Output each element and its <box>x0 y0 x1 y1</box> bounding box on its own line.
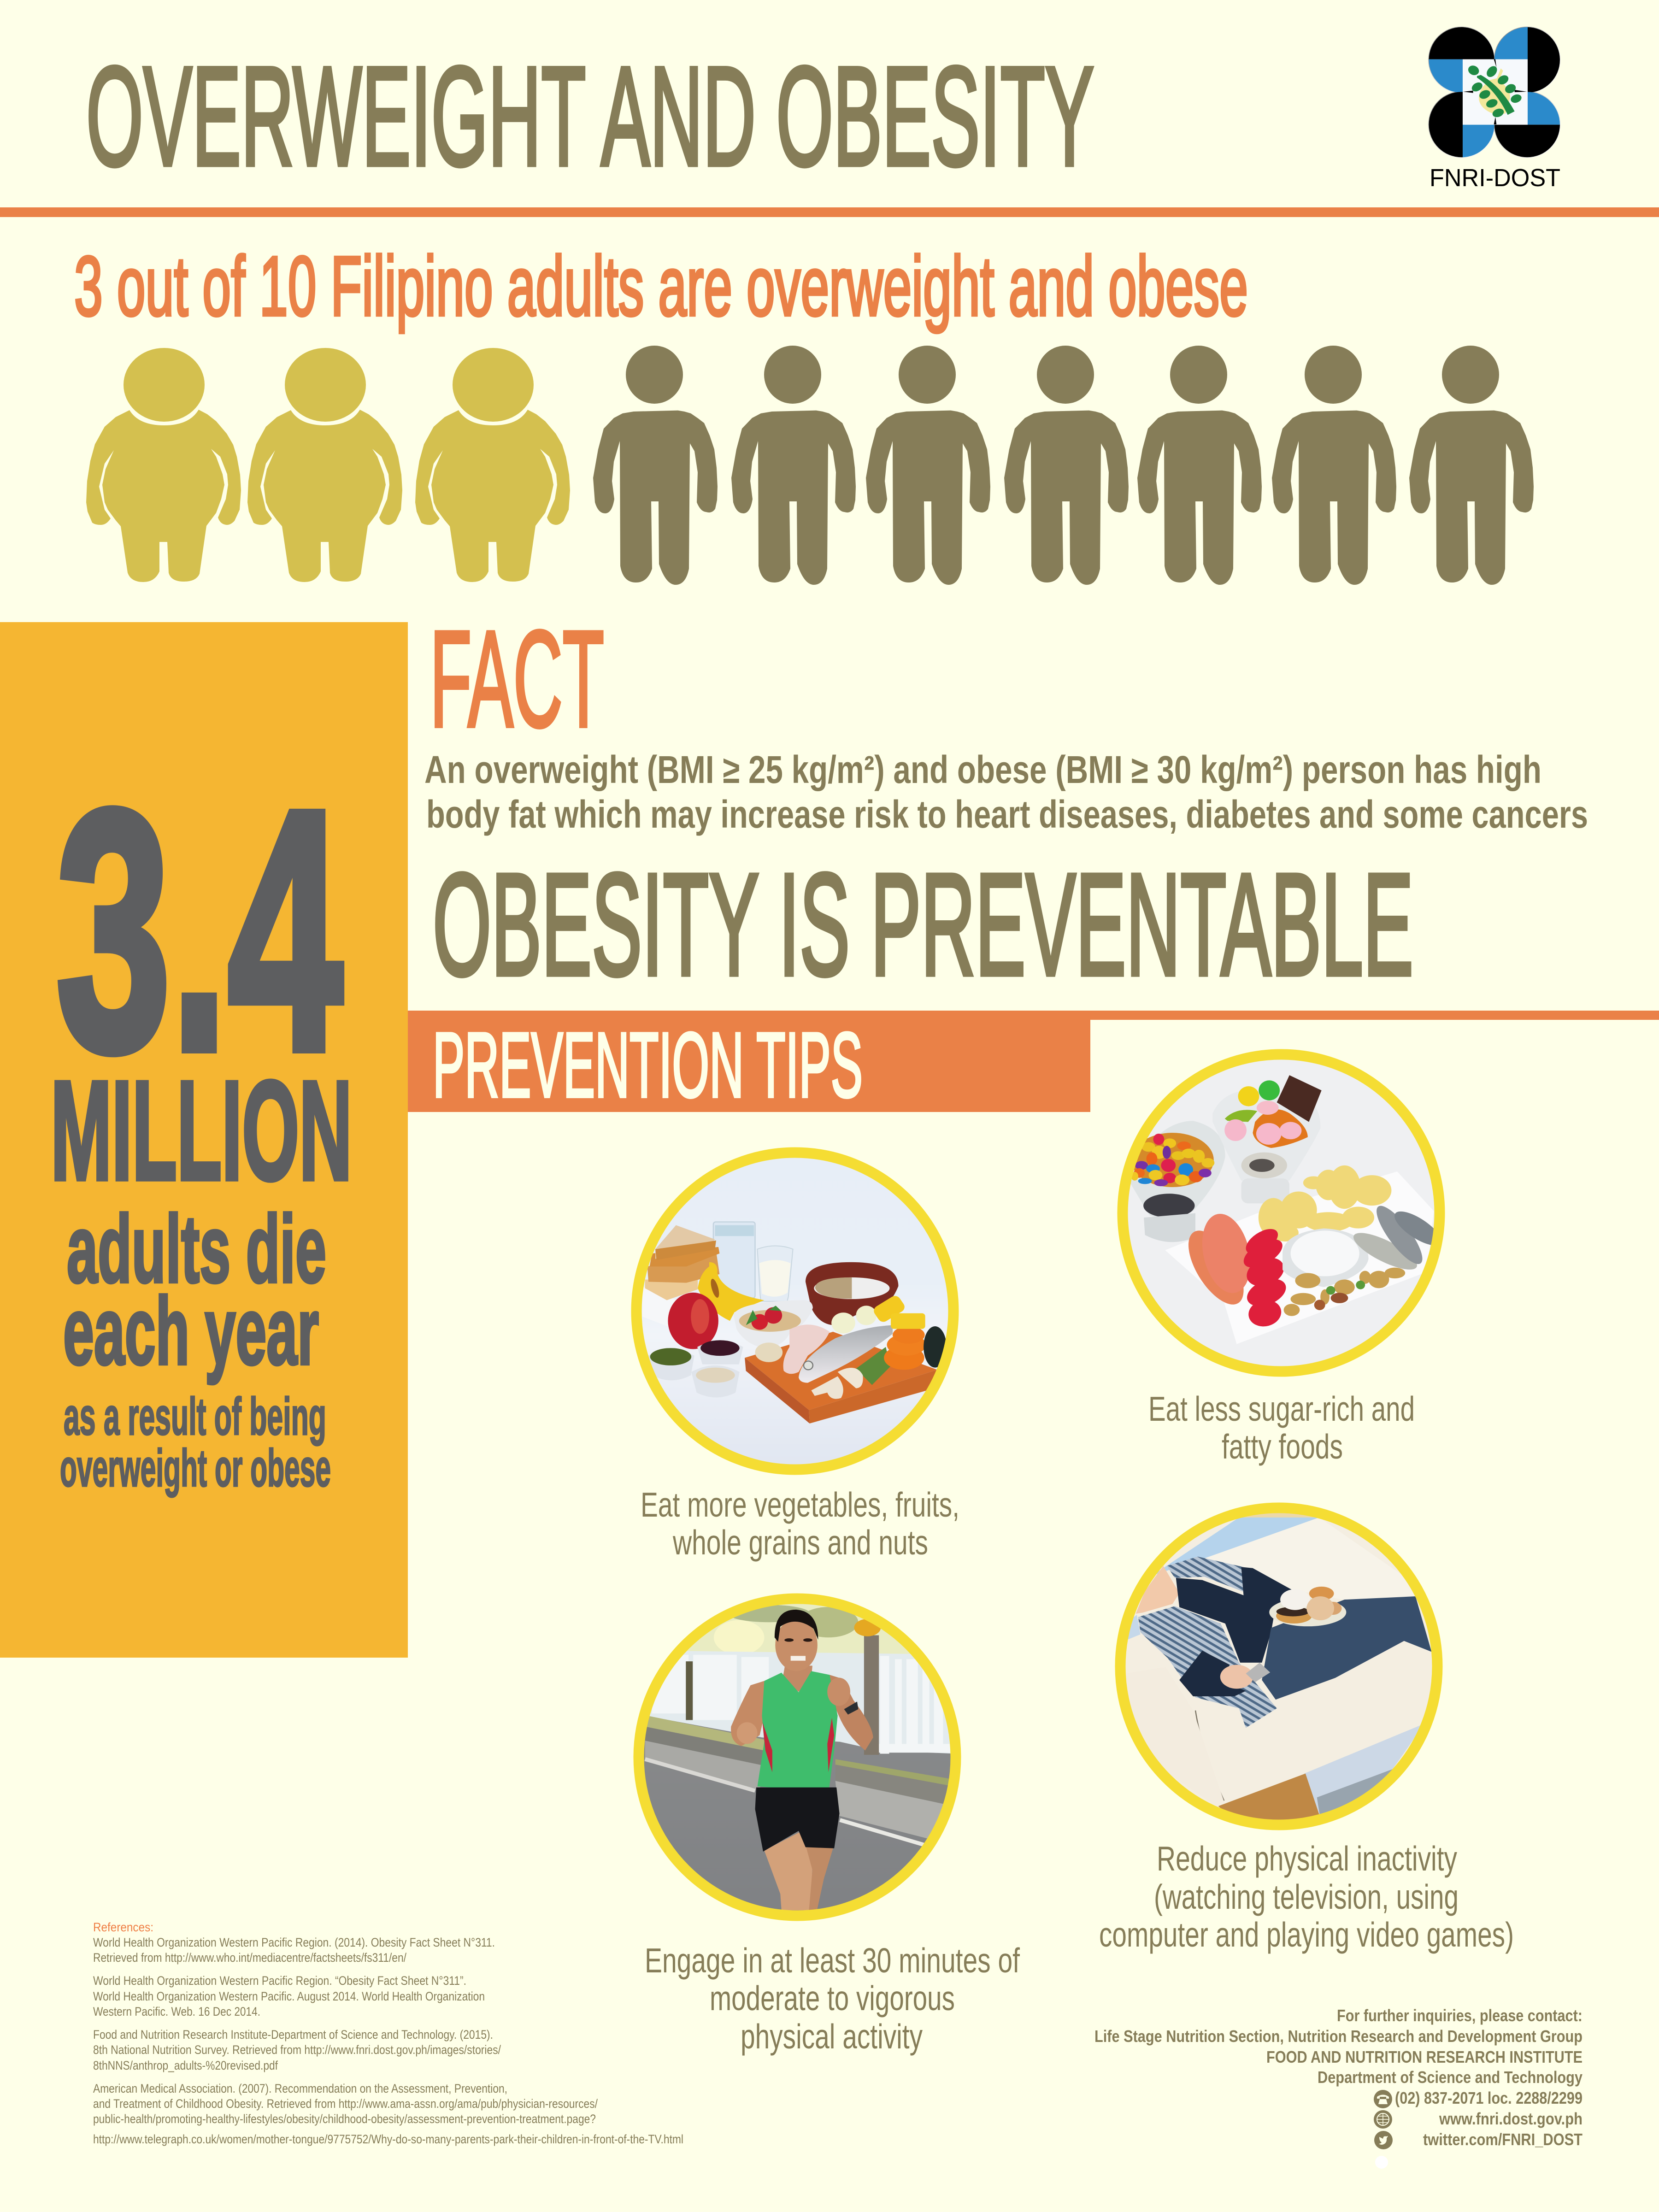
contact block: Department of Science and Technology <box>1318 2068 1583 2087</box>
divider line <box>408 1011 1659 1020</box>
references: Retrieved from http://www.who.int/mediacentre/factsheets/fs311/en/ <box>93 1951 406 1965</box>
references: and Treatment of Childhood Obesity. Retrieved from http://www.ama-assn.org/ama/pub/physician-resources/ <box>93 2097 598 2111</box>
logo caption: FNRI-DOST <box>1430 164 1560 192</box>
text: overweight or obese <box>60 1439 331 1497</box>
caption: engage: physical activity <box>741 2017 923 2056</box>
text: each year <box>63 1277 319 1385</box>
caption: engage: moderate to vigorous <box>710 1979 955 2018</box>
references: http://www.telegraph.co.uk/women/mother-tongue/9775752/Why-do-so-many-parents-park-their-children-in-front-of-the-TV.html <box>93 2132 683 2146</box>
icon: person 8 <box>1137 346 1262 585</box>
caption: reduce inactivity: computer and playing video games) <box>1099 1915 1514 1954</box>
pictogram row: 3 of 10 adults <box>86 346 1534 585</box>
caption: eat more: Eat more vegetables, fruits, <box>641 1485 959 1524</box>
yellow ring <box>1123 1054 1440 1371</box>
references: 8thNNS/anthrop_adults-%20revised.pdf <box>93 2059 278 2072</box>
contact block <box>1094 2006 1583 2169</box>
fact text <box>424 748 1588 836</box>
caption: eat more <box>641 1485 959 1562</box>
icon: globe <box>1374 2110 1392 2129</box>
tip photo: man on couch <box>1115 1502 1442 1830</box>
icon: twitter <box>1374 2131 1393 2149</box>
caption: eat more: whole grains and nuts <box>672 1523 928 1562</box>
icon: person 9 <box>1272 346 1396 585</box>
references heading: References: <box>93 1920 153 1934</box>
top divider band <box>0 207 1659 217</box>
caption: eat less: fatty foods <box>1222 1427 1343 1466</box>
references: World Health Organization Western Pacific Region. “Obesity Fact Sheet N°311”. <box>93 1974 466 1988</box>
contact block: For further inquiries, please contact: <box>1337 2006 1583 2025</box>
references <box>93 1920 683 2146</box>
references: public-health/promoting-healthy-lifestyles/obesity/childhood-obesity/assessment-prevention-treatment.page? <box>93 2112 596 2126</box>
icon: overweight person 1 <box>86 348 241 582</box>
contact block: Life Stage Nutrition Section, Nutrition Research and Development Group <box>1094 2027 1583 2046</box>
yellow ring <box>1120 1508 1437 1825</box>
panel: 3.4 million statistic <box>0 622 408 1658</box>
yellow ring <box>639 1599 956 1916</box>
icon: person 10 <box>1409 346 1534 585</box>
caption: reduce inactivity <box>1099 1839 1514 1954</box>
tip photo: healthy foods <box>631 1147 959 1475</box>
icon: person 4 <box>593 346 718 585</box>
caption: reduce inactivity: (watching television, using <box>1154 1877 1459 1916</box>
caption: reduce inactivity: Reduce physical inactivity <box>1157 1839 1457 1878</box>
yellow ring <box>636 1153 953 1470</box>
text: adults die <box>67 1195 326 1302</box>
text: as a result of being <box>64 1387 326 1446</box>
logo: FNRI-DOST <box>1427 26 1561 159</box>
contact block: twitter.com/FNRI_DOST <box>1423 2130 1583 2149</box>
caption: engage <box>645 1941 1020 2056</box>
pale oval mark <box>1375 2156 1388 2169</box>
icon: overweight person 2 <box>247 348 402 582</box>
icon: person 6 <box>866 346 990 585</box>
caption: eat less: Eat less sugar-rich and <box>1148 1389 1415 1428</box>
icon: person 5 <box>731 346 856 585</box>
references: American Medical Association. (2007). Recommendation on the Assessment, Prevention, <box>93 2082 507 2095</box>
references: 8th National Nutrition Survey. Retrieved from http://www.fnri.dost.gov.ph/images/stories/ <box>93 2043 501 2057</box>
references: World Health Organization Western Pacific. August 2014. World Health Organization <box>93 1989 485 2003</box>
contact block: (02) 837-2071 loc. 2288/2299 <box>1395 2088 1583 2107</box>
contact block: www.fnri.dost.gov.ph <box>1439 2109 1583 2128</box>
text: 3.4 <box>56 740 344 1121</box>
references: Western Pacific. Web. 16 Dec 2014. <box>93 2005 260 2018</box>
caption: engage: Engage in at least 30 minutes of <box>645 1941 1020 1980</box>
icon: person 7 <box>1004 346 1129 585</box>
references: Food and Nutrition Research Institute-Department of Science and Technology. (2015). <box>93 2028 493 2041</box>
contact block: FOOD AND NUTRITION RESEARCH INSTITUTE <box>1266 2047 1583 2066</box>
icon: overweight person 3 <box>415 348 570 582</box>
caption: eat less <box>1148 1389 1415 1466</box>
icon: phone <box>1374 2090 1392 2108</box>
tip photo: sugar-rich and fatty foods <box>1117 1049 1445 1377</box>
banner: prevention tips <box>408 1011 1090 1117</box>
text: MILLION <box>51 1052 352 1209</box>
references: World Health Organization Western Pacific Region. (2014). Obesity Fact Sheet N°311. <box>93 1936 495 1949</box>
tip photo: woman jogging <box>633 1594 961 1921</box>
